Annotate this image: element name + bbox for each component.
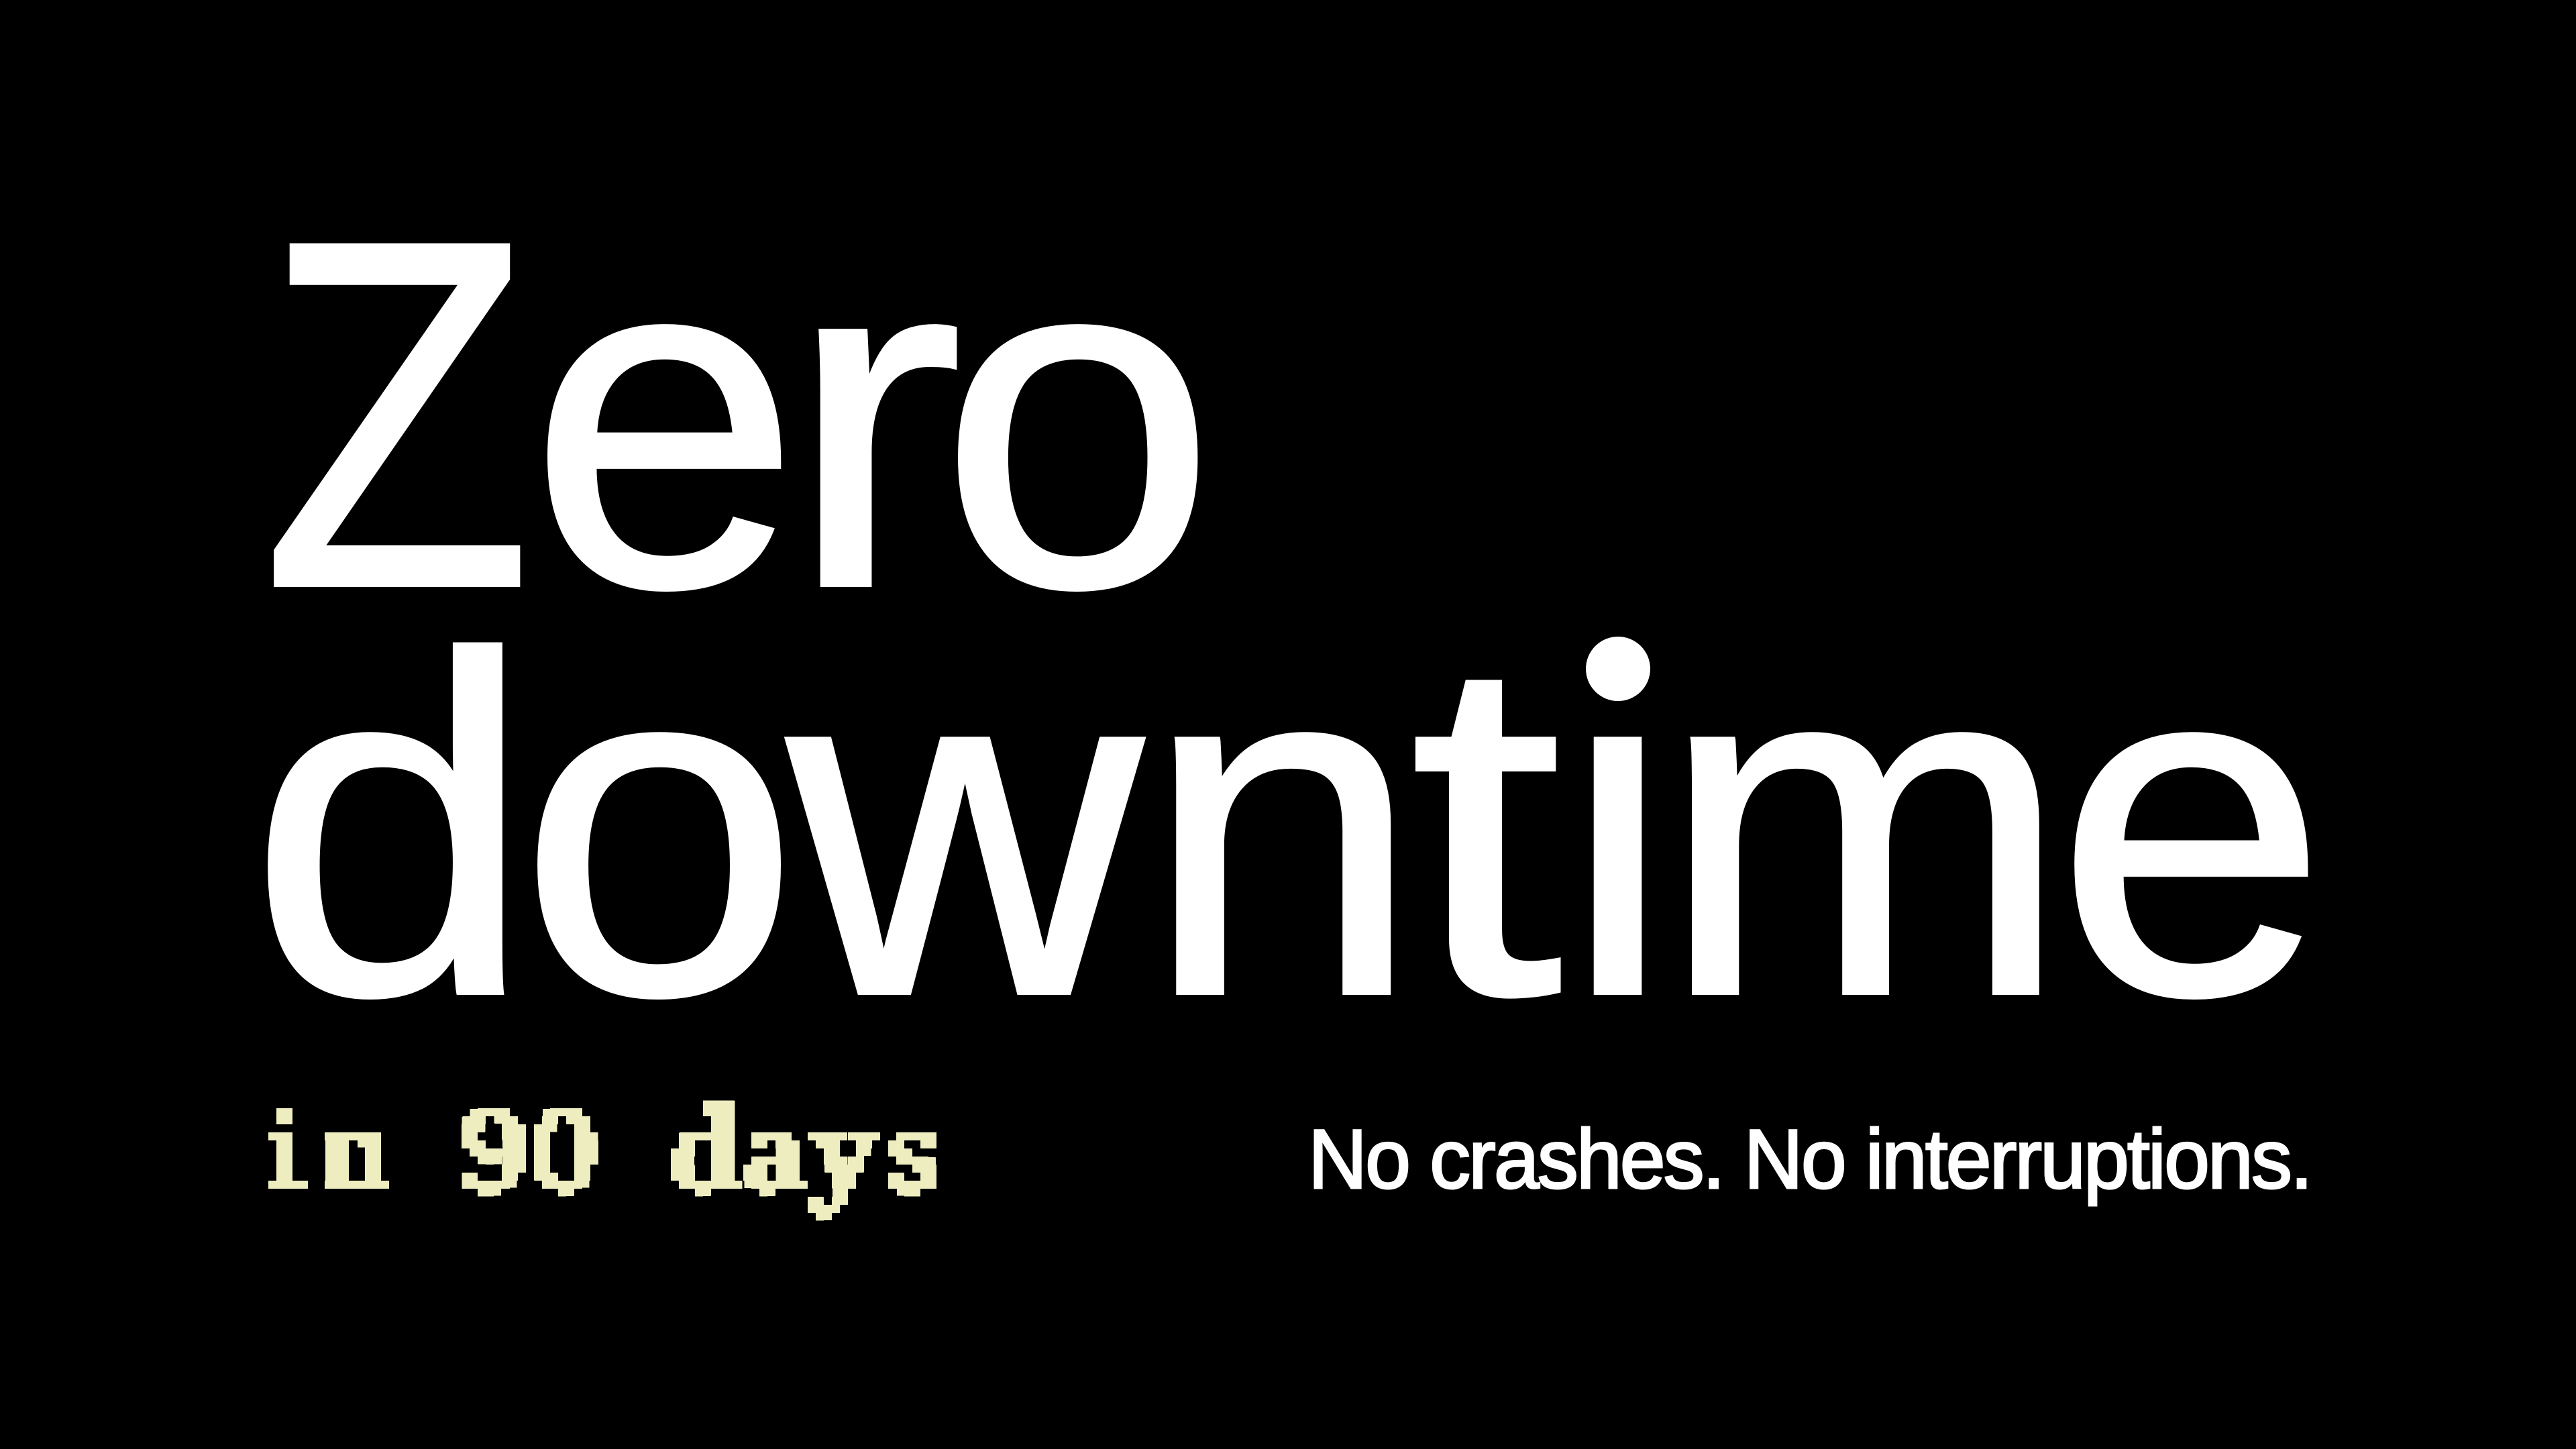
title line: downtime: n	[1144, 557, 1421, 1095]
icon: round dot of the i	[1586, 637, 1650, 701]
title line: downtime: m	[1660, 557, 2070, 1095]
title line: downtime: w	[780, 557, 1148, 1095]
pixel subtitle: in 90 days: in 90 days	[267, 1085, 938, 1215]
title line: Zero: e	[529, 150, 801, 687]
tagline: No crashes. No interruptions.	[1308, 1113, 2311, 1206]
title	[248, 138, 2328, 1095]
title line: Zero: o	[939, 150, 1216, 687]
title line: Zero: r	[786, 150, 963, 687]
title line: downtime: i	[1562, 557, 1673, 1095]
mask over the square i dot	[1577, 621, 1659, 718]
title line: Zero: Z	[262, 138, 532, 690]
title line: downtime: e	[2055, 557, 2328, 1095]
title line: downtime: t	[1409, 557, 1564, 1095]
title line: downtime: d	[248, 557, 535, 1095]
title line: downtime: o	[519, 557, 800, 1095]
